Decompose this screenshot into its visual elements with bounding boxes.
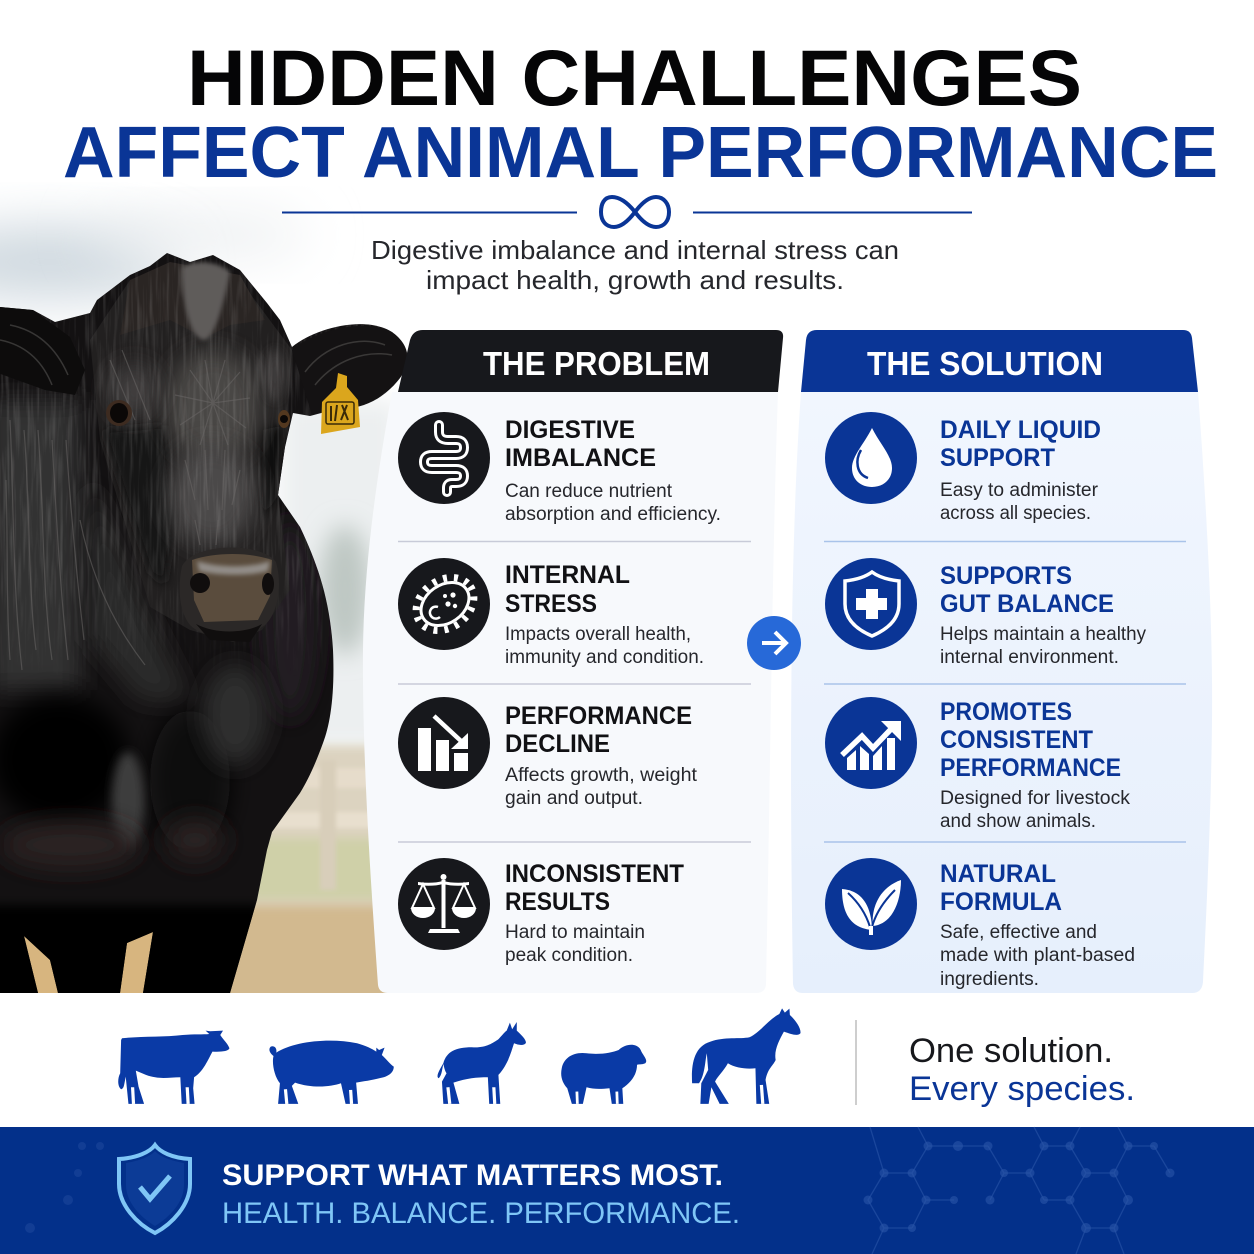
item: digestive imbalance: absorption and efficiency. [505,504,721,525]
item: internal stress: INTERNAL [505,561,630,589]
item: supports gut balance: SUPPORTS [940,562,1072,590]
item: inconsistent results: INCONSISTENT [505,860,684,888]
item: internal stress: STRESS [505,590,597,618]
icon: cow [118,1031,229,1104]
muzzle [180,547,279,637]
item: promotes consistent performance: PROMOTES [940,698,1072,726]
title: AFFECT ANIMAL PERFORMANCE [63,113,1218,193]
item: promotes consistent performance: Designed for livestock [940,788,1130,809]
item: daily liquid support: DAILY LIQUID [940,416,1101,444]
tagline: One solution. [909,1032,1113,1070]
item: natural formula: made with plant-based [940,945,1135,966]
subtitle: Digestive imbalance and internal stress can [371,235,899,265]
ear tag [321,373,360,434]
item: performance decline: DECLINE [505,730,610,758]
item: promotes consistent performance: and show animals. [940,811,1096,832]
item: digestive imbalance [398,412,721,525]
farm background scene [0,213,400,1015]
lower body shadows [0,695,130,825]
item: digestive imbalance: Can reduce nutrient [505,481,673,502]
item: daily liquid support: SUPPORT [940,444,1055,472]
item: natural formula [825,858,1135,990]
ears [0,305,85,395]
item: supports gut balance: internal environment. [940,647,1119,668]
subtitle [371,235,899,295]
problem header: THE PROBLEM [483,345,710,382]
item: inconsistent results [398,858,684,966]
problem header [398,330,783,392]
subtitle: impact health, growth and results. [426,265,844,295]
item: natural formula: NATURAL [940,860,1056,888]
arrow connector [747,616,801,670]
item: inconsistent results: peak condition. [505,945,633,966]
solution header [801,330,1198,392]
tagline [856,1020,1135,1108]
item: promotes consistent performance: PERFORMANCE [940,754,1121,782]
solution header: THE SOLUTION [867,345,1103,382]
icon: goat [438,1022,526,1104]
icon: shield check [119,1145,190,1233]
fur strands [6,350,250,670]
icon: sheep [561,1045,646,1104]
item: supports gut balance: Helps maintain a healthy [940,624,1146,645]
infinity divider [282,197,972,227]
icon: horse [692,1008,801,1104]
footer banner: SUPPORT WHAT MATTERS MOST. [222,1159,723,1192]
item: promotes consistent performance: CONSISTENT [940,726,1093,754]
cow photo illustration [0,250,420,1005]
footer banner [0,1127,1254,1254]
item: natural formula: ingredients. [940,969,1039,990]
tagline: Every species. [909,1070,1135,1108]
head shape [90,280,292,642]
item: internal stress: Impacts overall health, [505,624,691,645]
item: promotes consistent performance [825,697,1130,832]
title: HIDDEN CHALLENGES [187,33,1082,122]
item: daily liquid support: across all species. [940,503,1091,524]
panel: the problem [363,330,783,993]
panel: the solution [791,330,1212,993]
footer banner: HEALTH. BALANCE. PERFORMANCE. [222,1197,740,1230]
item: performance decline: PERFORMANCE [505,702,692,730]
item: performance decline: Affects growth, weight [505,765,698,786]
item: inconsistent results: RESULTS [505,888,610,916]
item: daily liquid support: Easy to administer [940,480,1099,501]
neck and body tones [0,400,80,690]
item: supports gut balance: GUT BALANCE [940,590,1114,618]
item: internal stress [398,558,704,668]
item: daily liquid support [825,412,1101,524]
item: digestive imbalance: IMBALANCE [505,444,656,472]
item: performance decline: gain and output. [505,788,643,809]
item: performance decline [398,697,698,809]
icon: pig [269,1041,394,1104]
item: natural formula: FORMULA [940,888,1062,916]
item: digestive imbalance: DIGESTIVE [505,416,635,444]
item: supports gut balance [825,558,1146,668]
title [63,33,1218,193]
item: internal stress: immunity and condition. [505,647,704,668]
item: inconsistent results: Hard to maintain [505,922,645,943]
species silhouettes [118,1008,801,1104]
eyes [106,400,132,426]
item: natural formula: Safe, effective and [940,922,1097,943]
